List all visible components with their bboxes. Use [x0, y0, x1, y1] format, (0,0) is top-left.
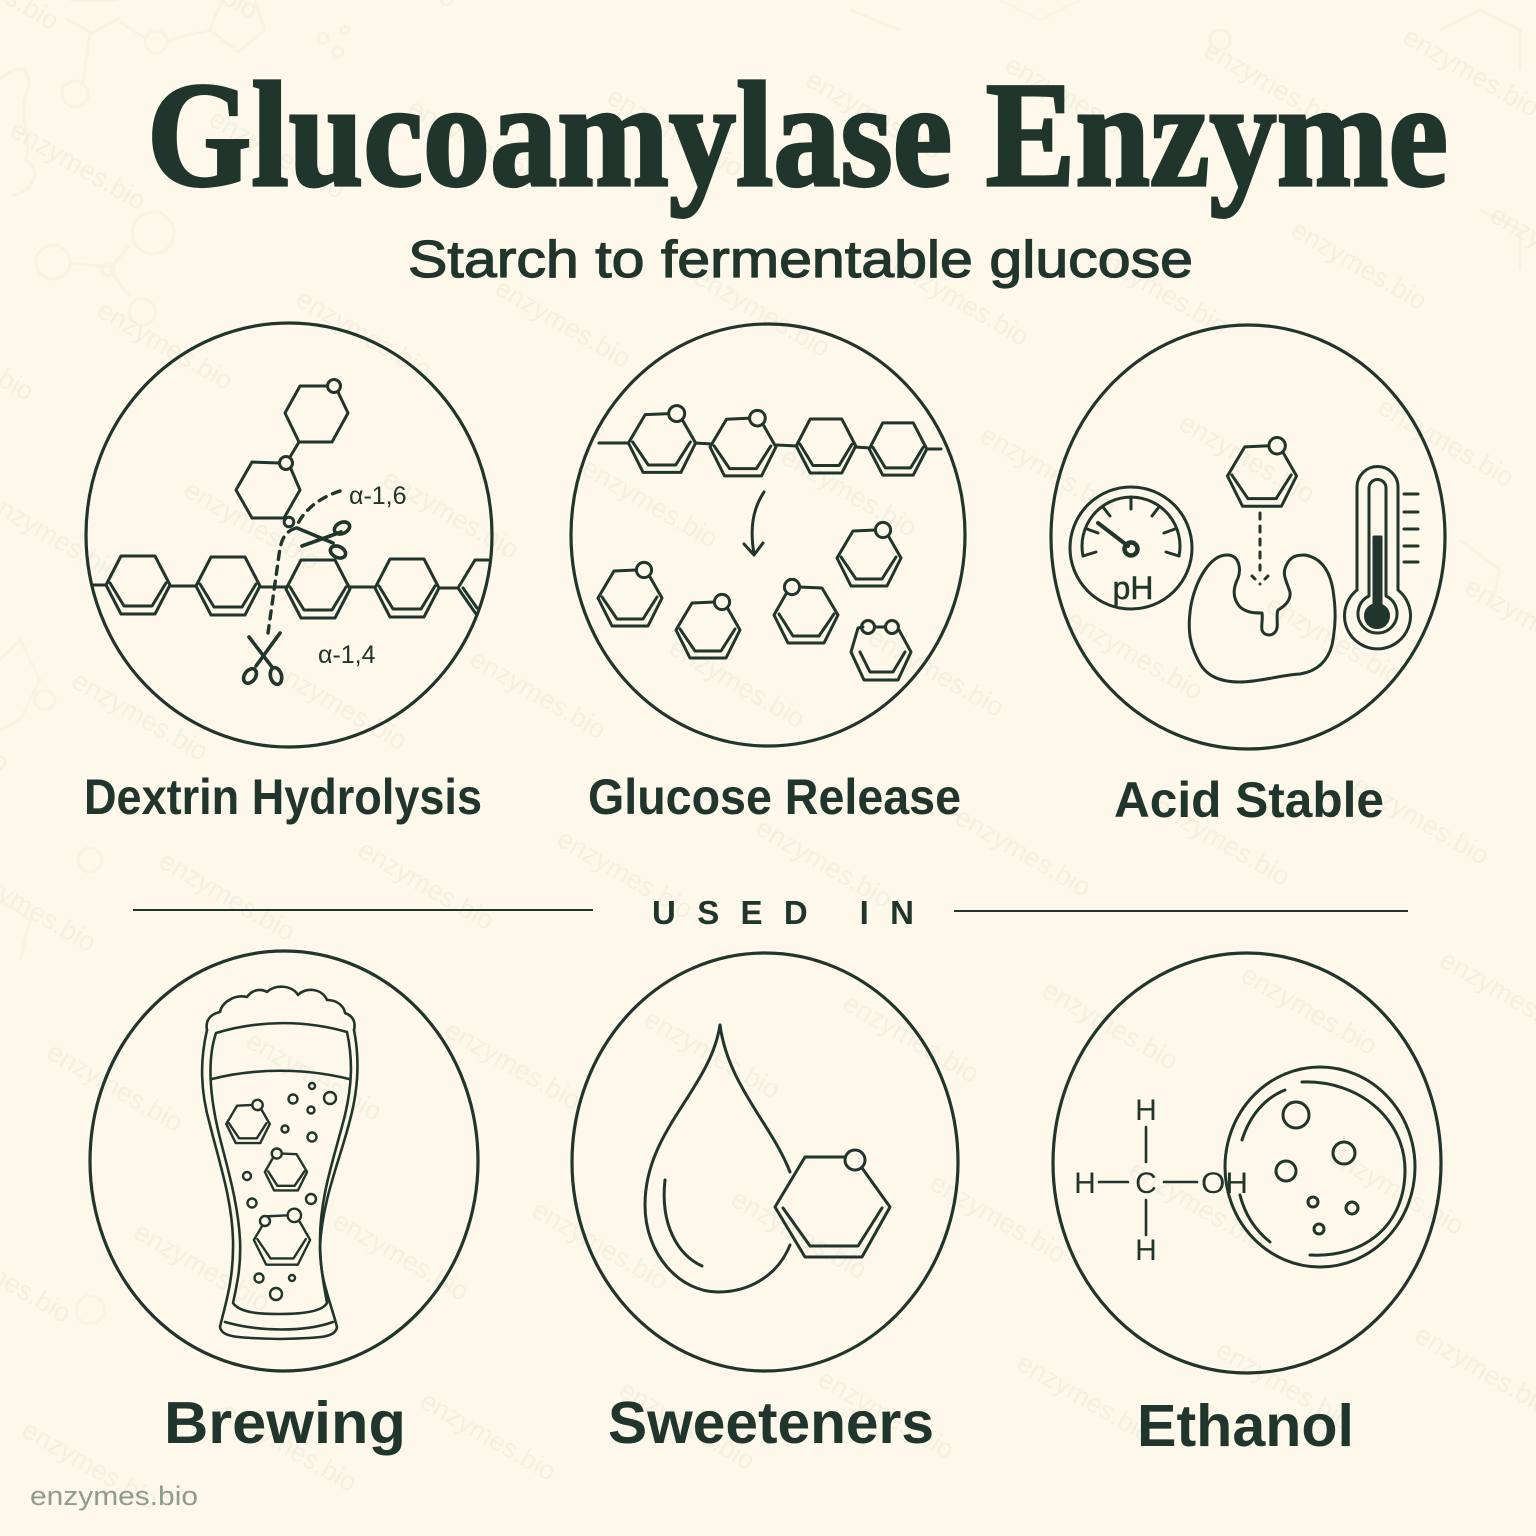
background watermark pattern: enzymes.bio — [1149, 790, 1295, 892]
background watermark pattern: enzymes.bio — [490, 272, 636, 374]
background watermark pattern: enzymes.bio — [602, 81, 748, 183]
background watermark pattern: enzymes.bio — [813, 1363, 959, 1465]
subtitle: Starch to fermentable glucose — [408, 231, 1193, 289]
background watermark pattern: enzymes.bio — [1199, 34, 1345, 136]
section divider: used in: USED IN — [652, 894, 914, 931]
ethanol formula — [1074, 1094, 1248, 1267]
background watermark pattern: enzymes.bio — [726, 1183, 872, 1285]
circle outline — [90, 951, 478, 1371]
background watermark pattern: enzymes.bio — [415, 1385, 561, 1487]
rings in beer — [226, 1100, 310, 1265]
background watermark pattern: enzymes.bio — [154, 845, 300, 947]
heading: glucose release: Glucose Release — [588, 769, 961, 825]
background watermark pattern: enzymes.bio — [465, 643, 611, 745]
background watermark pattern: enzymes.bio — [925, 1167, 1071, 1269]
background watermark pattern: enzymes.bio — [1323, 1139, 1469, 1241]
background watermark pattern: enzymes.bio — [801, 64, 947, 166]
heading: brewing: Brewing — [164, 1390, 406, 1456]
source credit: enzymes.bio — [30, 1481, 198, 1511]
heading: dextrin hydrolysis: Dextrin Hydrolysis — [84, 769, 482, 825]
background watermark pattern: enzymes.bio — [5, 114, 151, 216]
ethanol formula: H — [1135, 1234, 1157, 1267]
circle outline — [86, 323, 492, 747]
heading: ethanol: Ethanol — [1137, 1393, 1354, 1459]
background watermark pattern: enzymes.bio — [664, 632, 810, 734]
petri dish — [1225, 1067, 1415, 1267]
background watermark pattern: enzymes.bio — [888, 250, 1034, 352]
background watermark pattern: enzymes.bio — [838, 987, 984, 1089]
background watermark pattern: enzymes.bio — [1037, 974, 1183, 1076]
background watermark pattern: enzymes.bio — [17, 1414, 163, 1516]
enzyme shape — [1189, 555, 1335, 682]
dashed cut paths — [268, 491, 340, 633]
panel: brewing — [90, 951, 478, 1371]
panel: dextrin hydrolysis — [86, 323, 492, 747]
background watermark pattern: enzymes.bio — [689, 261, 835, 363]
background watermark pattern: enzymes.bio — [950, 801, 1096, 903]
background watermark pattern: enzymes.bio — [1000, 49, 1146, 151]
background watermark pattern: enzymes.bio — [1174, 407, 1320, 509]
ethanol formula: H — [1135, 1094, 1157, 1127]
pH gauge — [1070, 487, 1192, 609]
background watermark pattern: enzymes.bio — [266, 654, 412, 756]
free glucose rings — [598, 522, 911, 680]
dashed arrow to active site — [1252, 513, 1268, 584]
background watermark pattern: enzymes.bio — [975, 419, 1121, 521]
background watermark pattern: enzymes.bio — [577, 452, 723, 554]
panel: glucose release — [571, 324, 965, 746]
circle outline — [1053, 953, 1441, 1373]
scissors: alpha-1,4 cut — [241, 633, 284, 686]
background watermark pattern: enzymes.bio — [403, 92, 549, 194]
circle outline — [1051, 325, 1445, 749]
label: alpha-1,4: α-1,4 — [318, 641, 376, 669]
ethanol formula: OH — [1201, 1167, 1248, 1200]
background watermark pattern: enzymes.bio — [67, 665, 213, 767]
scissors: alpha-1,6 cut — [297, 520, 352, 560]
beer glass — [202, 987, 357, 1339]
background watermark pattern: enzymes.bio — [776, 441, 922, 543]
glucose chain — [599, 406, 941, 476]
background watermark pattern: enzymes.bio — [527, 1194, 673, 1296]
main starch chain — [92, 556, 488, 618]
background watermark pattern: enzymes.bio — [378, 463, 524, 565]
background watermark pattern: enzymes.bio — [216, 1396, 362, 1498]
panel: sweeteners — [572, 953, 958, 1371]
background watermark pattern: enzymes.bio — [751, 812, 897, 914]
background watermark pattern: enzymes.bio — [1348, 769, 1494, 871]
branch rings — [236, 380, 348, 527]
syrup drop — [645, 1025, 790, 1292]
background watermark pattern: enzymes.bio — [863, 621, 1009, 723]
pH label: pH — [1113, 570, 1153, 606]
background watermark pattern: enzymes.bio — [1087, 239, 1233, 341]
beer bubbles — [243, 1083, 336, 1300]
release arrow — [744, 492, 764, 555]
background watermark pattern: enzymes.bio — [1124, 1154, 1270, 1256]
background watermark pattern: enzymes.bio — [204, 103, 350, 205]
background watermark pattern: enzymes.bio — [1373, 391, 1519, 493]
heading: acid stable: Acid Stable — [1114, 772, 1384, 828]
panel: ethanol — [1053, 953, 1441, 1373]
background watermark pattern: enzymes.bio — [328, 1205, 474, 1307]
background watermark pattern: enzymes.bio — [1286, 214, 1432, 316]
circle outline — [572, 953, 958, 1371]
panel: acid stable — [1051, 325, 1445, 749]
heading: sweeteners: Sweeteners — [608, 1390, 934, 1456]
background watermark pattern: enzymes.bio — [92, 294, 238, 396]
glucose ring — [775, 1150, 890, 1257]
ethanol formula: H — [1074, 1167, 1096, 1200]
thermometer — [1344, 466, 1418, 649]
background watermark pattern: enzymes.bio — [1236, 959, 1382, 1061]
background watermark pattern: enzymes.bio — [42, 1036, 188, 1138]
circle outline — [571, 324, 965, 746]
background watermark pattern: enzymes.bio — [440, 1014, 586, 1116]
ethanol formula: C — [1135, 1167, 1157, 1200]
background watermark pattern: enzymes.bio — [129, 1216, 275, 1318]
background watermark pattern: enzymes.bio — [1062, 604, 1208, 706]
background watermark pattern: enzymes.bio — [1211, 1334, 1357, 1436]
background watermark pattern: enzymes.bio — [552, 823, 698, 925]
background watermark pattern: enzymes.bio — [614, 1374, 760, 1476]
label: alpha-1,6: α-1,6 — [349, 482, 407, 510]
background watermark pattern: enzymes.bio — [1261, 589, 1407, 691]
background watermark pattern: enzymes.bio — [291, 283, 437, 385]
background watermark pattern: enzymes.bio — [1012, 1347, 1158, 1449]
background watermark pattern: enzymes.bio — [639, 1003, 785, 1105]
substrate ring — [1227, 438, 1297, 506]
background watermark pattern: enzymes.bio — [241, 1025, 387, 1127]
background watermark pattern: enzymes.bio — [353, 834, 499, 936]
background watermark pattern: enzymes.bio — [179, 474, 325, 576]
